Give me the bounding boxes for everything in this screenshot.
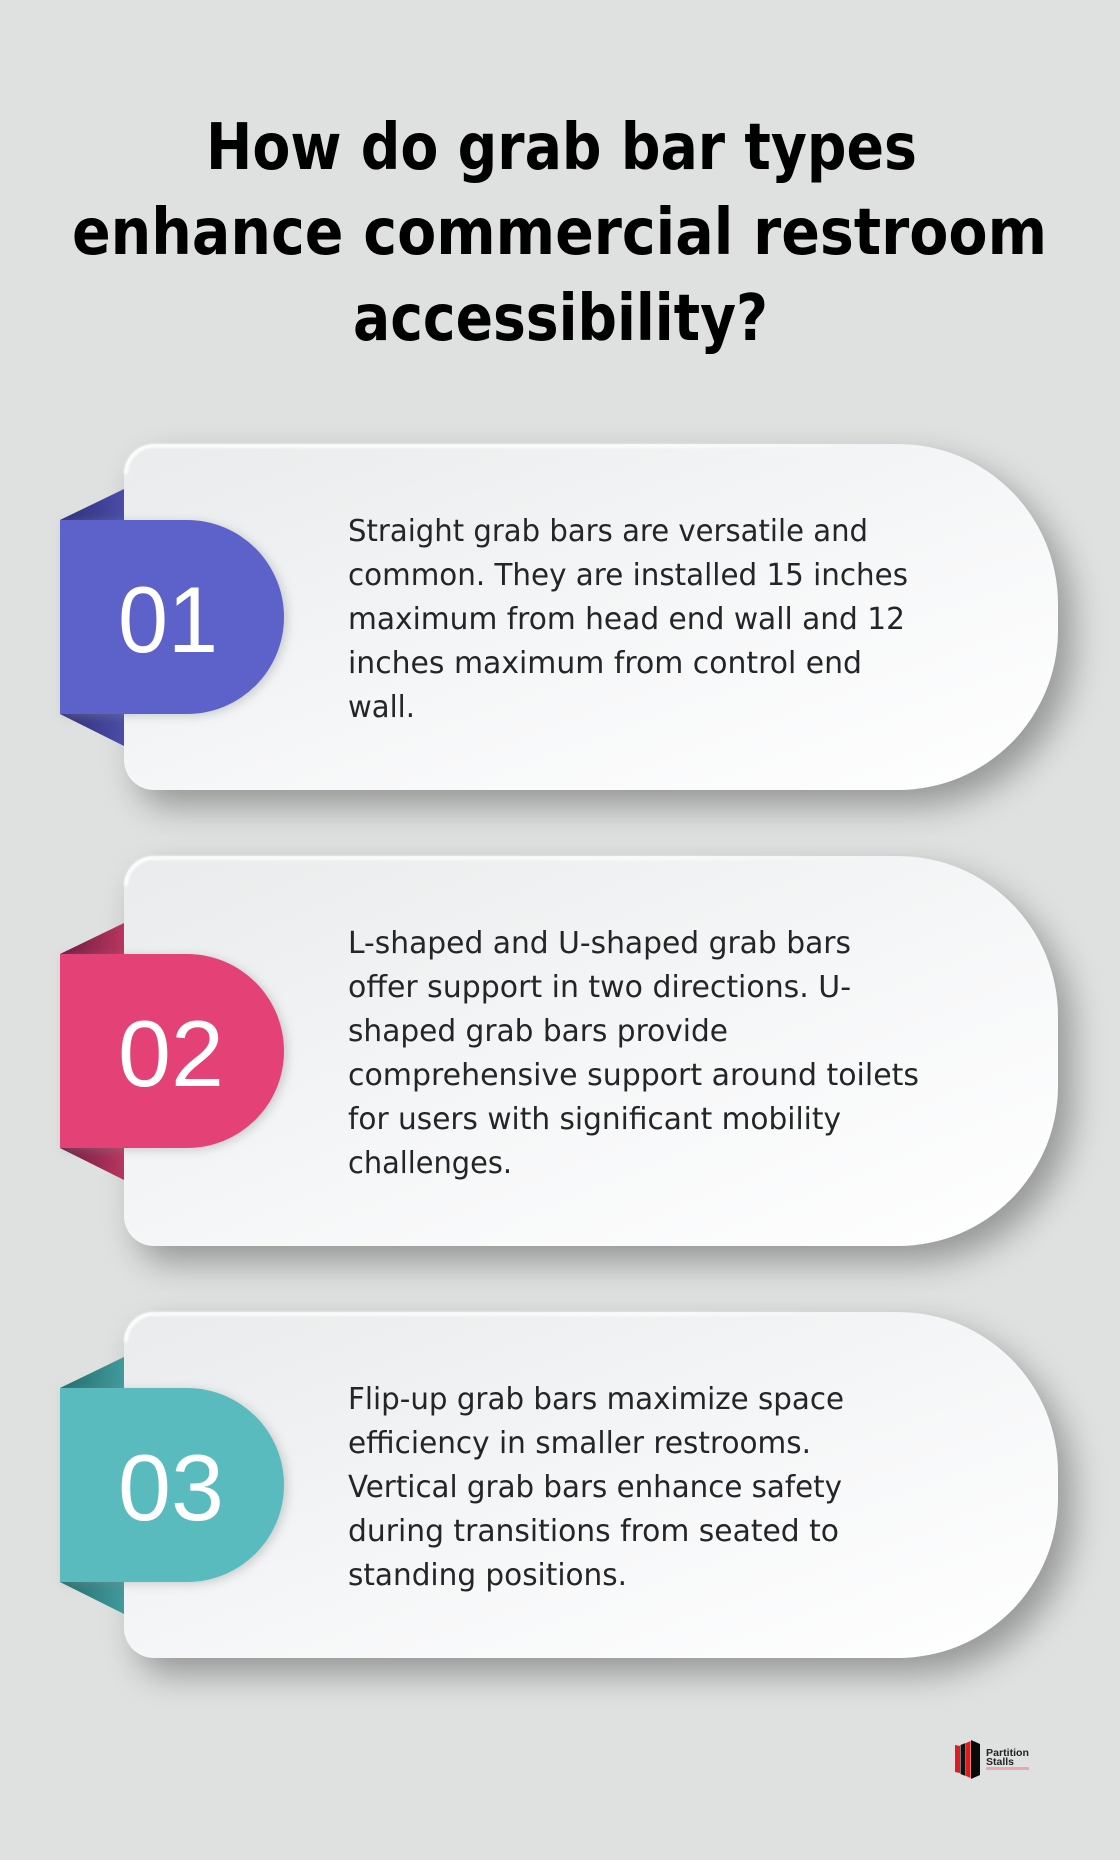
text: step 1: wall. (348, 690, 415, 725)
text: step 3: efficiency in smaller restrooms. (348, 1426, 811, 1461)
number badge: step 2: 02 (118, 1001, 224, 1106)
text: step 1: maximum from head end wall and 12 (348, 602, 905, 637)
title: accessibility? (353, 282, 768, 356)
text: step 2: shaped grab bars provide (348, 1014, 728, 1049)
text: step 2: comprehensive support around toilets (348, 1058, 919, 1093)
text: step 1: inches maximum from control end (348, 646, 862, 681)
number badge: step 1: 01 (118, 567, 218, 672)
number badge: step 3: 03 (118, 1435, 224, 1540)
logo: Partition Stalls (955, 1740, 1029, 1779)
ribbon folds: step 1 (60, 489, 124, 746)
ribbon folds: step 2 (60, 923, 124, 1180)
number badge: step 2 (60, 954, 284, 1148)
ribbon folds: step 3 (60, 1357, 124, 1614)
text: step 2: L-shaped and U-shaped grab bars (348, 926, 851, 961)
text: step 3: standing positions. (348, 1558, 627, 1593)
text: step 3 (348, 1382, 844, 1593)
text: step 2: challenges. (348, 1146, 512, 1181)
text: step 3: during transitions from seated to (348, 1514, 839, 1549)
text: step 2: offer support in two directions. U- (348, 970, 851, 1005)
text: step 3: Flip-up grab bars maximize space (348, 1382, 844, 1417)
text: step 1 (348, 514, 908, 725)
panel: step 1 (60, 444, 1072, 806)
logo: Partition Stalls: Partition (986, 1747, 1029, 1759)
text: step 2 (348, 926, 919, 1181)
number badge: step 3 (60, 1388, 284, 1582)
panel: step 2 (60, 856, 1072, 1262)
text: step 1: common. They are installed 15 inches (348, 558, 908, 593)
text: step 1: Straight grab bars are versatile and (348, 514, 868, 549)
number badge: step 1 (60, 520, 284, 714)
logo: Partition Stalls: Stalls (986, 1756, 1014, 1768)
card: step 1 (124, 444, 1058, 790)
panel: step 3 (60, 1312, 1072, 1674)
text: step 3: Vertical grab bars enhance safety (348, 1470, 842, 1505)
title (72, 111, 1047, 356)
title: How do grab bar types (206, 111, 917, 185)
card: step 2 (124, 856, 1058, 1246)
text: step 2: for users with significant mobility (348, 1102, 841, 1137)
card: step 3 (124, 1312, 1058, 1658)
